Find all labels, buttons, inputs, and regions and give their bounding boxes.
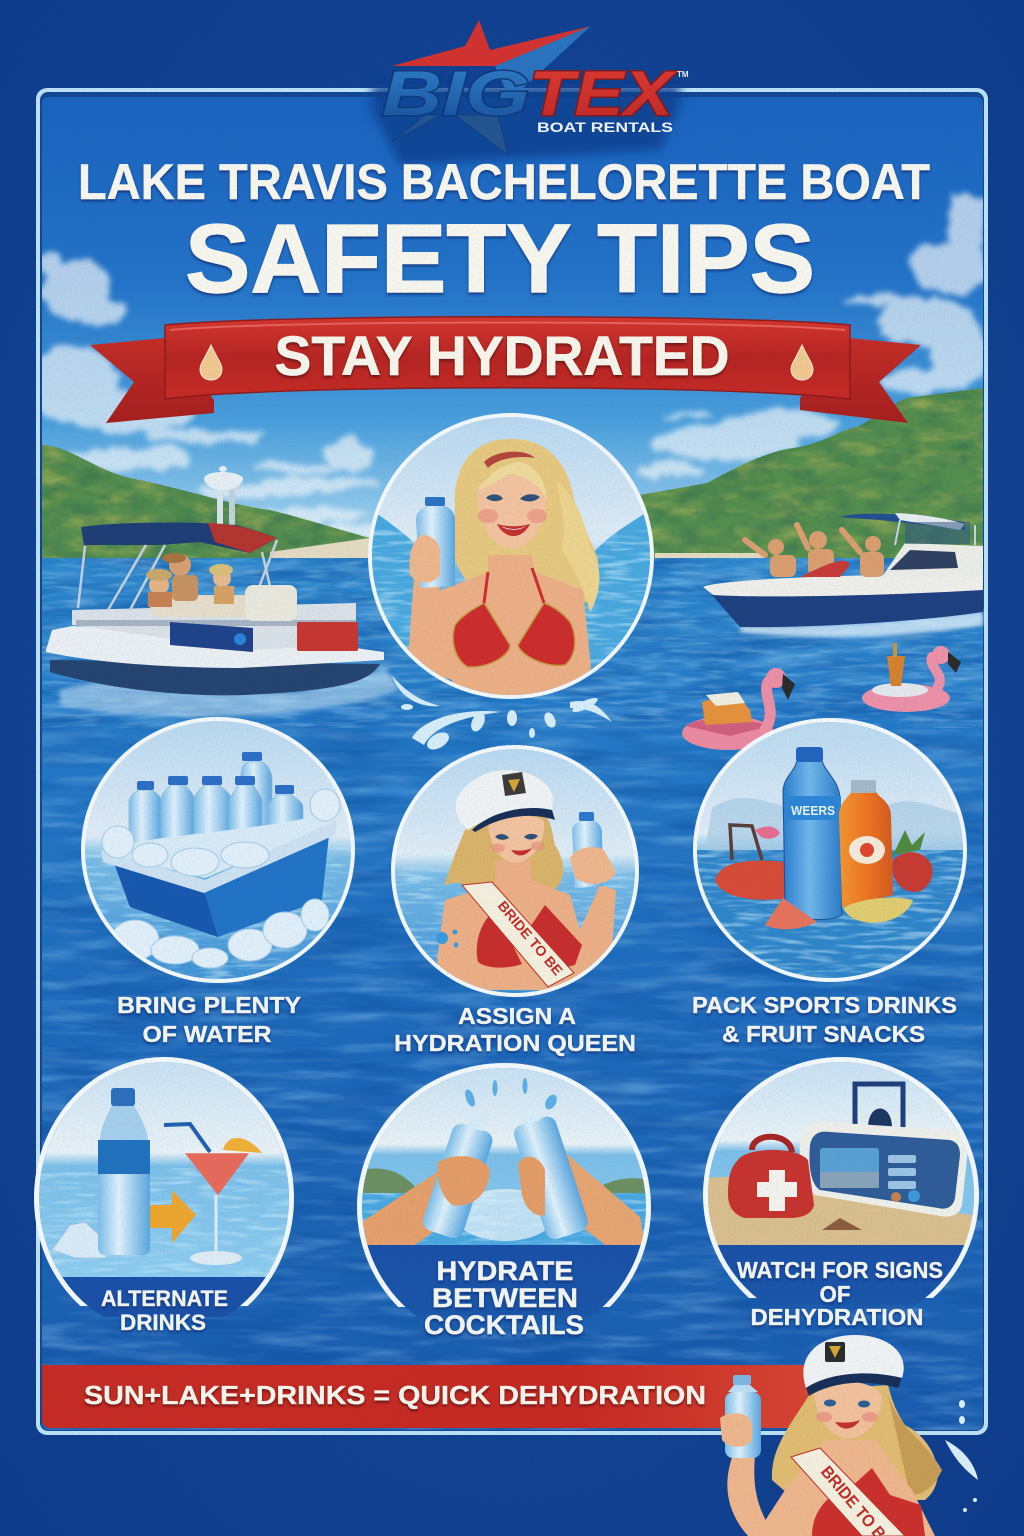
title line: LAKE TRAVIS BACHELORETTE BOAT <box>78 154 930 210</box>
logo wordmark <box>382 59 678 129</box>
face <box>477 476 546 549</box>
torso <box>437 860 616 990</box>
hair front lock <box>556 480 599 612</box>
label: assign a hydration queen: ASSIGN A <box>458 1003 576 1029</box>
hills right <box>640 385 985 565</box>
fruit slices <box>843 898 913 923</box>
mascot sash <box>791 1448 905 1536</box>
ribbon text: STAY HYDRATED <box>274 324 730 387</box>
float <box>715 861 787 900</box>
splash under top circle <box>392 676 612 753</box>
water texture <box>42 558 983 1430</box>
circle: sports drinks and fruit <box>692 712 970 987</box>
label: assign a hydration queen: HYDRATION QUEEN <box>394 1030 636 1056</box>
title: safety tips: SAFETY TIPS <box>185 204 815 313</box>
circle: hydrating bride <box>368 413 658 710</box>
logo subtitle: BOAT RENTALS <box>537 120 673 135</box>
hat <box>456 770 553 830</box>
label: hydrate between cocktails: BETWEEN <box>432 1283 578 1313</box>
mascot bottle <box>720 1375 761 1458</box>
label: pack sports drinks: & FRUIT SNACKS <box>722 1021 925 1047</box>
speedboat <box>703 513 983 637</box>
label: watch for signs: WATCH FOR SIGNS <box>737 1257 943 1283</box>
label: hydrate between cocktails <box>424 1256 584 1340</box>
hair <box>444 815 563 892</box>
lake water <box>42 558 983 1430</box>
warning bar <box>42 1365 810 1428</box>
logo wordmark: BIG <box>382 59 530 129</box>
drop left <box>200 345 222 380</box>
label: bring plenty of water: OF WATER <box>142 1021 272 1047</box>
drop right <box>791 345 813 380</box>
circle: sports drinks and fruit: WEERS <box>791 803 835 818</box>
label: alternate drinks: ALTERNATE <box>101 1286 228 1311</box>
circle: watch for signs of dehydration <box>704 1058 979 1330</box>
label: bring plenty of water <box>117 992 301 1047</box>
mascot hat <box>803 1335 904 1388</box>
circle: bring plenty of water <box>80 715 360 990</box>
strawberry <box>892 852 933 892</box>
mascot splash <box>945 1400 978 1512</box>
label: assign a hydration queen <box>394 1003 636 1056</box>
flamingo float left <box>682 668 795 750</box>
water tower <box>204 466 243 525</box>
label: alternate drinks <box>101 1286 228 1335</box>
warning text: SUN+LAKE+DRINKS = QUICK DEHYDRATION <box>84 1380 706 1410</box>
pontoon boat <box>46 522 400 717</box>
label: alternate drinks: DRINKS <box>120 1310 206 1335</box>
clouds <box>24 192 988 536</box>
bride mascot <box>720 1335 978 1536</box>
flamingo float right <box>862 643 961 712</box>
circle: alternate drinks <box>35 1055 295 1336</box>
hills left <box>42 445 370 558</box>
mascot hair <box>772 1385 938 1500</box>
beaches <box>270 538 764 558</box>
bottles <box>129 752 303 850</box>
label: hydrate between cocktails: HYDRATE <box>436 1256 574 1286</box>
label: pack sports drinks <box>692 992 957 1047</box>
mascot face <box>814 1382 882 1439</box>
torso <box>408 555 591 695</box>
logo star <box>392 20 591 155</box>
label: watch for signs: DEHYDRATION <box>750 1304 924 1330</box>
trademark: TM <box>677 70 689 79</box>
label: watch for signs: OF <box>820 1281 850 1307</box>
water drops <box>436 930 458 948</box>
label: watch for signs <box>737 1257 943 1330</box>
logo wordmark: TEX <box>529 59 678 129</box>
circle: hydration queen: BRIDE TO BE <box>495 898 566 978</box>
sports bottle <box>839 790 893 907</box>
water bottle <box>783 760 842 920</box>
mascot arm <box>727 1450 775 1536</box>
label: bring plenty of water: BRING PLENTY <box>117 992 301 1018</box>
sash <box>462 882 574 987</box>
hair back <box>453 439 598 602</box>
label: pack sports drinks: PACK SPORTS DRINKS <box>692 992 957 1018</box>
mascot body <box>755 1440 935 1536</box>
bottle <box>572 820 603 888</box>
arm and bottle <box>408 575 440 668</box>
bikini <box>453 603 575 667</box>
label: hydrate between cocktails: COCKTAILS <box>424 1310 584 1340</box>
bikini <box>477 905 582 970</box>
ribbon: stay hydrated <box>90 317 921 423</box>
ice <box>102 789 340 968</box>
circle: hydration queen <box>390 745 640 997</box>
cooler <box>115 838 329 937</box>
circle: hydrate between cocktails <box>358 1065 653 1348</box>
logo <box>372 20 689 165</box>
face <box>488 816 544 863</box>
